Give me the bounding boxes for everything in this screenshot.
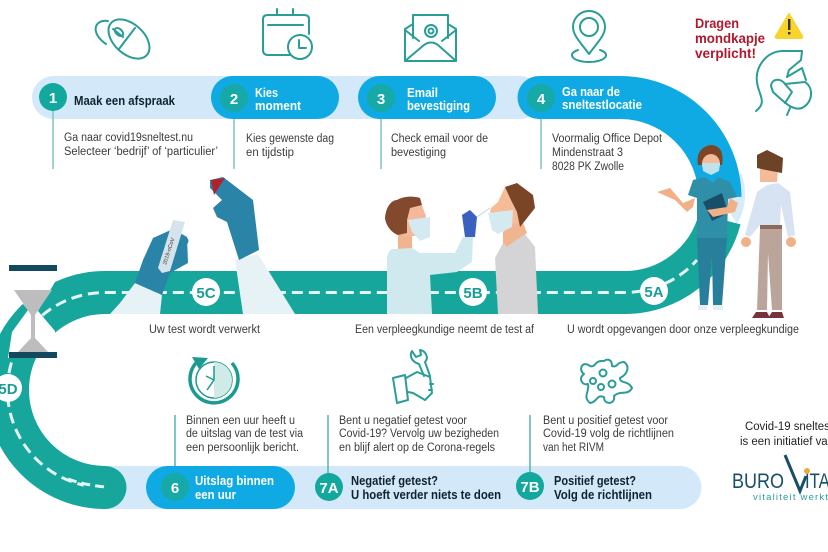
5D marker bbox=[0, 374, 22, 402]
step 7B: 7B bbox=[520, 479, 540, 496]
step 7A bbox=[315, 415, 501, 502]
5B marker: 5B bbox=[463, 285, 483, 302]
step 4: 8028 PK Zwolle bbox=[552, 161, 624, 173]
step 4: Voormalig Office Depot bbox=[552, 133, 663, 145]
5C marker: 5C bbox=[196, 285, 216, 302]
figure: patient bbox=[488, 183, 538, 314]
hourglass gap bbox=[8, 282, 57, 358]
step 2: 2 bbox=[230, 91, 238, 108]
road: teal route bbox=[8, 219, 720, 488]
icon: location pin bbox=[572, 11, 606, 62]
figure: man bbox=[741, 150, 796, 318]
logo: Burovital: vitaliteit werkt bbox=[753, 492, 828, 503]
figure: tester bbox=[385, 197, 490, 314]
step 6: Uitslag binnen bbox=[195, 474, 274, 488]
icon: warning triangle bbox=[776, 14, 802, 38]
icon: virus bbox=[581, 360, 632, 403]
step 6: de uitslag van de test via bbox=[186, 428, 304, 440]
step 3: Email bbox=[407, 86, 438, 100]
caption 5A: U wordt opgevangen door onze verpleegkundige bbox=[567, 324, 799, 336]
icon: envelope bbox=[405, 15, 456, 61]
step 4: Ga naar de bbox=[562, 85, 620, 99]
step 7A: Covid-19? Vervolg uw bezigheden bbox=[339, 428, 499, 440]
step 1 bbox=[39, 83, 218, 169]
5C glove and sleeve: 2019-nCoV bbox=[162, 237, 177, 266]
step 7B: Volg de richtlijnen bbox=[554, 488, 652, 502]
road end cap bbox=[84, 466, 126, 509]
step 4: Mindenstraat 3 bbox=[552, 147, 623, 159]
5A marker: 5A bbox=[644, 284, 664, 301]
lower light bar bbox=[105, 466, 702, 509]
step 1: Selecteer ‘bedrijf’ of ‘particulier’ bbox=[64, 146, 218, 158]
warning text: mondkapje bbox=[695, 31, 765, 46]
caption 5C: Uw test wordt verwerkt bbox=[149, 324, 261, 336]
logo: Burovital bbox=[732, 455, 828, 503]
figure: nurse bbox=[657, 145, 738, 310]
warning text: verplicht! bbox=[695, 46, 756, 61]
logo: Burovital: BURO bbox=[732, 470, 784, 493]
5A marker bbox=[640, 277, 668, 305]
icon: face with mask bbox=[756, 51, 811, 115]
step 7A: 7A bbox=[319, 480, 339, 497]
step 7B: van het RIVM bbox=[543, 442, 604, 454]
step 4 bbox=[518, 76, 720, 197]
icon: hand with wrench bbox=[393, 350, 433, 403]
step 2 bbox=[211, 76, 339, 169]
road dashes bbox=[8, 260, 697, 488]
step 3: bevestiging bbox=[407, 99, 470, 113]
step 6: een uur bbox=[195, 488, 236, 502]
step 1: Maak een afspraak bbox=[74, 94, 175, 108]
5B marker bbox=[459, 278, 487, 306]
step 7B: Positief getest? bbox=[554, 474, 636, 488]
step 6: 6 bbox=[171, 480, 179, 497]
step 6: Binnen een uur heeft u bbox=[186, 415, 295, 427]
step 3 bbox=[358, 76, 496, 169]
step 2: Kies bbox=[255, 86, 278, 100]
5C marker bbox=[192, 278, 220, 306]
step 4: sneltestlocatie bbox=[562, 98, 642, 112]
step 7A: en blijf alert op de Corona-regels bbox=[339, 442, 495, 454]
warning text bbox=[695, 16, 765, 61]
step 4: 4 bbox=[537, 91, 546, 108]
caption 5B: Een verpleegkundige neemt de test af bbox=[355, 324, 535, 336]
pale tail behind nurse bbox=[722, 172, 745, 224]
step 1: Ga naar covid19sneltest.nu bbox=[64, 132, 193, 144]
step 6: een persoonlijk bericht. bbox=[186, 442, 299, 454]
icon: mouse bbox=[96, 12, 157, 66]
road end dash bbox=[68, 479, 106, 487]
hourglass bbox=[9, 265, 57, 358]
step 3: Check email voor de bbox=[391, 133, 488, 145]
icon: clock bbox=[190, 357, 238, 403]
step 7B bbox=[516, 415, 674, 502]
step 7A: Bent u negatief getest voor bbox=[339, 415, 467, 427]
step 2: Kies gewenste dag bbox=[246, 133, 334, 145]
step 7A: U hoeft verder niets te doen bbox=[351, 488, 501, 502]
top light bar bbox=[32, 76, 542, 119]
5C glove and sleeve bbox=[110, 177, 295, 314]
step 1: 1 bbox=[49, 90, 57, 107]
step 3: bevestiging bbox=[391, 147, 446, 159]
step 7B: Bent u positief getest voor bbox=[543, 415, 668, 427]
step 2: moment bbox=[255, 99, 302, 113]
step 7B: Covid-19 volg de richtlijnen bbox=[543, 428, 674, 440]
step 6 bbox=[146, 415, 304, 509]
warning text: Dragen bbox=[695, 16, 739, 31]
initiative text bbox=[740, 421, 828, 448]
step 3: 3 bbox=[377, 91, 385, 108]
icon: calendar bbox=[263, 9, 312, 59]
step 2: en tijdstip bbox=[246, 147, 294, 159]
step 7A: Negatief getest? bbox=[351, 474, 438, 488]
